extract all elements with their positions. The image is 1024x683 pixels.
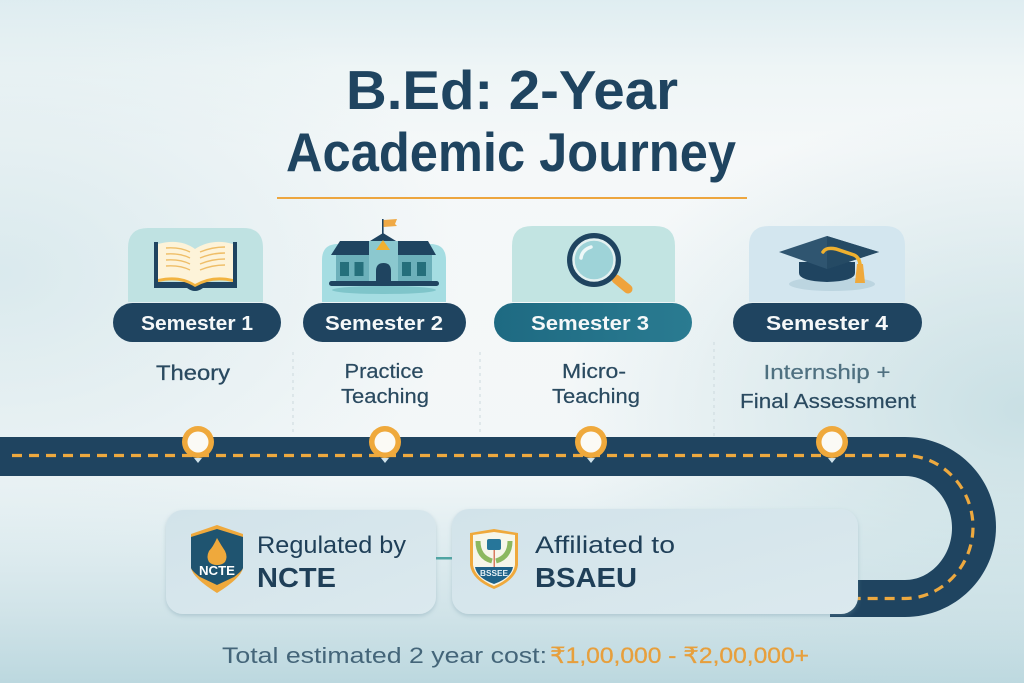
label: Practice Teaching: Practice [344, 361, 424, 383]
label: Internship + Final Assessment: Internship + [764, 361, 890, 384]
pill: Semester 2: Semester 2 [325, 313, 443, 335]
panel: semester 1 [113, 228, 281, 385]
panel: semester 3 [494, 226, 692, 408]
card text: NCTE [257, 562, 336, 593]
card text [257, 532, 406, 593]
pill: Semester 4 [733, 303, 922, 342]
title: B.Ed: 2-Year [346, 59, 678, 121]
pill: Semester 1 [113, 303, 281, 342]
connector [435, 557, 453, 560]
marker 4 [816, 426, 848, 463]
pill: Semester 3 [494, 303, 692, 342]
pill: Semester 1: Semester 1 [141, 313, 253, 335]
cost line: ₹1,00,000 - ₹2,00,000+ [550, 643, 809, 668]
card text: BSAEU [535, 562, 637, 593]
milestone markers [182, 426, 848, 463]
label: Internship + Final Assessment: Final Assessment [740, 390, 916, 413]
panel: BSAEU card [452, 509, 858, 614]
label: Micro-Teaching: Micro- [562, 361, 626, 383]
dashed column dividers [293, 342, 714, 436]
icon: magnifying glass [512, 226, 675, 302]
marker 3 [575, 426, 607, 463]
icon: NCTE shield: NCTE [199, 563, 235, 578]
card text: Affiliated to [535, 532, 675, 559]
label: Micro-Teaching: Teaching [552, 386, 640, 408]
icon: open book [128, 228, 263, 302]
pill: Semester 2 [303, 303, 466, 342]
label: Internship + Final Assessment [740, 361, 916, 413]
title [286, 59, 736, 183]
label: Micro-Teaching [552, 361, 640, 408]
marker 2 [369, 426, 401, 463]
card text [535, 532, 675, 593]
label: Practice Teaching: Teaching [341, 386, 429, 408]
pill: Semester 4: Semester 4 [766, 313, 889, 335]
icon: BSAEU shield [470, 529, 518, 589]
cost line: Total estimated 2 year cost: [222, 643, 547, 668]
label: Theory: Theory [156, 362, 231, 385]
label: Practice Teaching [341, 361, 429, 408]
card text: Regulated by [257, 532, 406, 559]
road timeline [0, 437, 996, 617]
panel: semester 4 [733, 226, 922, 413]
marker 1 [182, 426, 214, 463]
icon: BSAEU shield: BSSEE [480, 569, 509, 578]
icon: NCTE shield [191, 525, 243, 593]
title: Academic Journey [286, 121, 736, 183]
cost line [222, 643, 809, 668]
panel: semester 2 [303, 219, 466, 408]
panel: NCTE card [166, 510, 436, 614]
icon: graduation cap [749, 226, 905, 302]
title underline [277, 197, 747, 199]
icon: school building [322, 219, 446, 302]
pill: Semester 3: Semester 3 [531, 313, 649, 335]
